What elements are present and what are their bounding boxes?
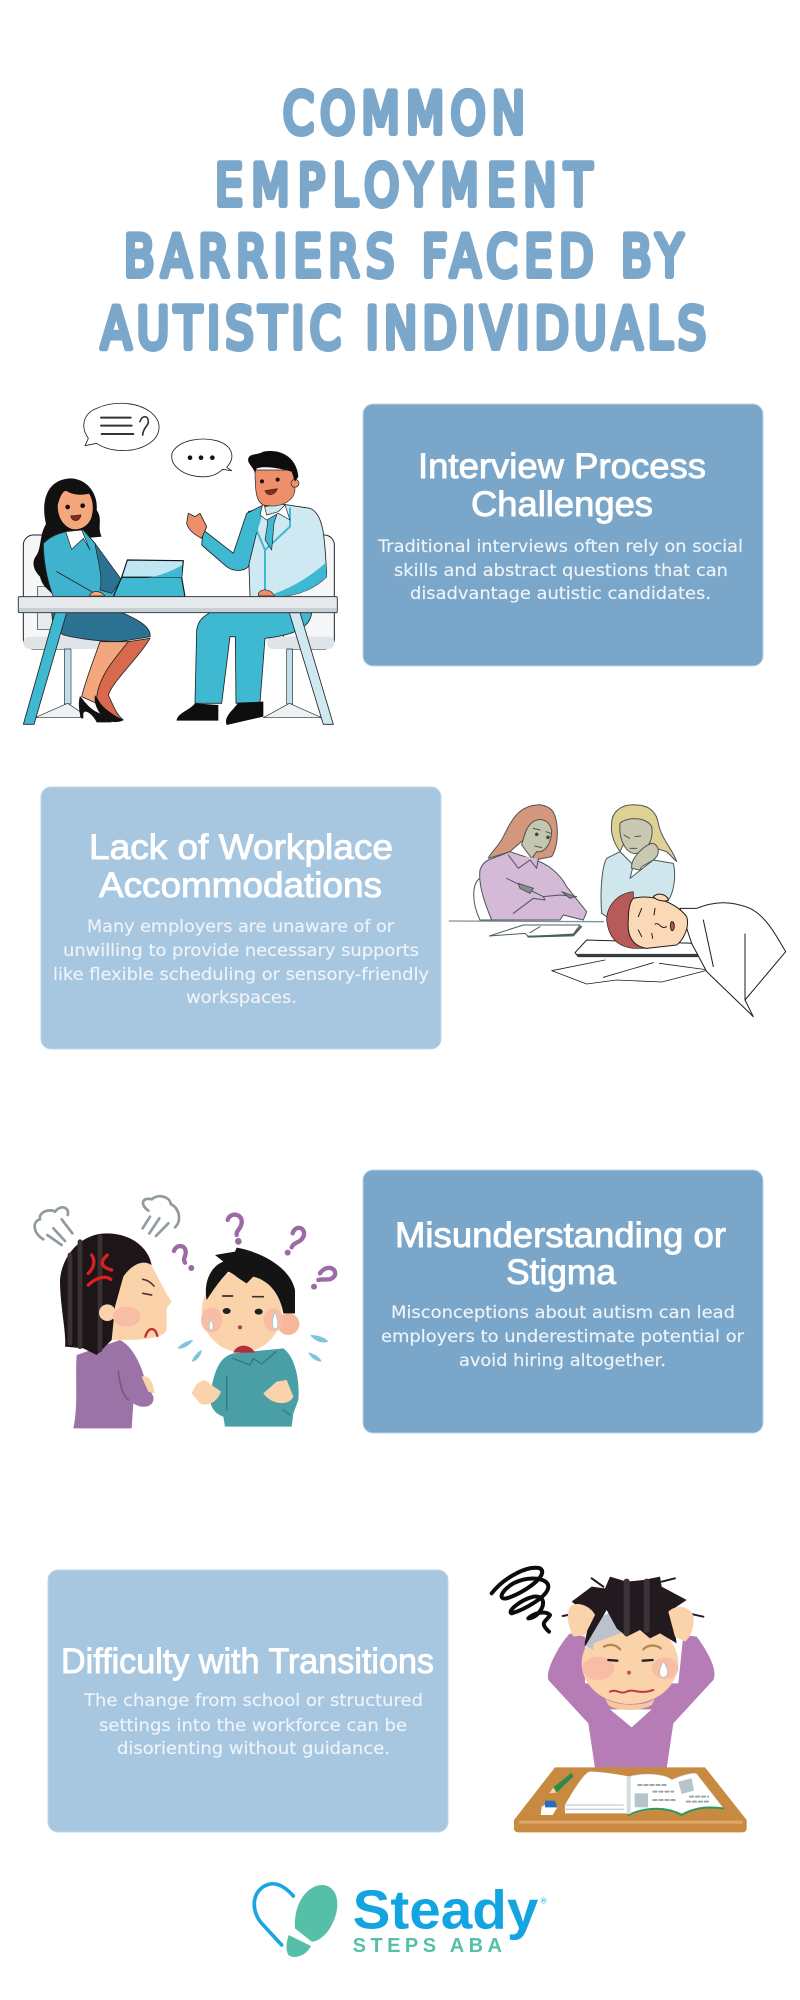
heading bbox=[418, 447, 706, 524]
speech bubble: question bbox=[84, 403, 159, 451]
man bbox=[192, 1248, 299, 1427]
body text: unwilling to provide necessary supports bbox=[63, 941, 419, 960]
body text bbox=[53, 917, 429, 1007]
body text bbox=[377, 537, 743, 603]
title: BARRIERS FACED BY bbox=[124, 225, 684, 290]
body text: like flexible scheduling or sensory-friendly bbox=[53, 965, 429, 984]
title bbox=[101, 82, 706, 362]
illustration: bored colleagues and person asleep on desk bbox=[449, 805, 786, 1017]
open book bbox=[565, 1772, 723, 1815]
body text: Many employers are unaware of or bbox=[87, 917, 394, 936]
body text: avoid hiring altogether. bbox=[459, 1351, 666, 1370]
title: AUTISTIC INDIVIDUALS bbox=[101, 297, 706, 362]
woman bbox=[60, 1233, 172, 1428]
heading bbox=[395, 1216, 726, 1292]
card: interview process challenges bbox=[363, 404, 763, 666]
body text: workspaces. bbox=[186, 988, 297, 1007]
body text: settings into the workforce can be bbox=[99, 1716, 407, 1735]
heading: Lack of Workplace bbox=[89, 828, 393, 867]
card: misunderstanding or stigma bbox=[363, 1170, 763, 1433]
heading: Accommodations bbox=[99, 866, 382, 905]
speech bubble: dots bbox=[172, 439, 232, 477]
sweat drops bbox=[177, 1335, 328, 1362]
heading: Interview Process bbox=[418, 447, 706, 486]
illustration: stressed student at desk bbox=[492, 1568, 747, 1832]
heading: Stigma bbox=[506, 1253, 617, 1292]
heading bbox=[89, 828, 393, 905]
question mark dots bbox=[188, 1238, 317, 1290]
tablet bbox=[113, 560, 185, 597]
registered mark: ® bbox=[541, 1896, 547, 1905]
logo mark: heart and footprint bbox=[254, 1884, 337, 1957]
illustration: job interview at a desk bbox=[18, 403, 337, 725]
man bbox=[177, 451, 327, 725]
body text bbox=[381, 1303, 744, 1370]
papers on table bbox=[489, 925, 581, 937]
desk bbox=[514, 1767, 747, 1832]
logo: Steady Steps ABA bbox=[254, 1878, 547, 1957]
table bbox=[18, 597, 337, 724]
woman resting chin on hand bbox=[601, 805, 677, 917]
body text: disadvantage autistic candidates. bbox=[410, 584, 711, 603]
scribble of confusion bbox=[492, 1568, 550, 1632]
tagline: STEPS ABA bbox=[353, 1935, 502, 1957]
illustration: angry woman and confused man bbox=[35, 1196, 335, 1428]
body text: Traditional interviews often rely on social bbox=[377, 537, 743, 556]
question marks bbox=[174, 1215, 335, 1280]
body text: disorienting without guidance. bbox=[117, 1739, 390, 1758]
title: COMMON bbox=[283, 82, 525, 147]
card: lack of workplace accommodations bbox=[41, 787, 441, 1049]
body text: skills and abstract questions that can bbox=[394, 561, 728, 580]
pencil bbox=[549, 1773, 573, 1793]
body text: Misconceptions about autism can lead bbox=[391, 1303, 735, 1322]
body text bbox=[83, 1691, 423, 1758]
card: difficulty with transitions bbox=[48, 1570, 448, 1832]
body text: employers to underestimate potential or bbox=[381, 1327, 744, 1346]
table edge bbox=[449, 919, 603, 924]
sleeping person bbox=[552, 892, 786, 1017]
student bbox=[548, 1577, 715, 1768]
title: EMPLOYMENT bbox=[215, 154, 593, 219]
body text: The change from school or structured bbox=[83, 1691, 423, 1710]
woman with crossed arms bbox=[474, 805, 587, 920]
heading: Misunderstanding or bbox=[395, 1216, 726, 1255]
chairs bbox=[23, 535, 334, 718]
heading: Challenges bbox=[471, 485, 653, 524]
wordmark: Steady bbox=[353, 1878, 539, 1940]
woman bbox=[33, 478, 150, 722]
heading: Difficulty with Transitions bbox=[61, 1642, 434, 1681]
eraser bbox=[541, 1801, 557, 1815]
steam puffs bbox=[35, 1196, 179, 1245]
